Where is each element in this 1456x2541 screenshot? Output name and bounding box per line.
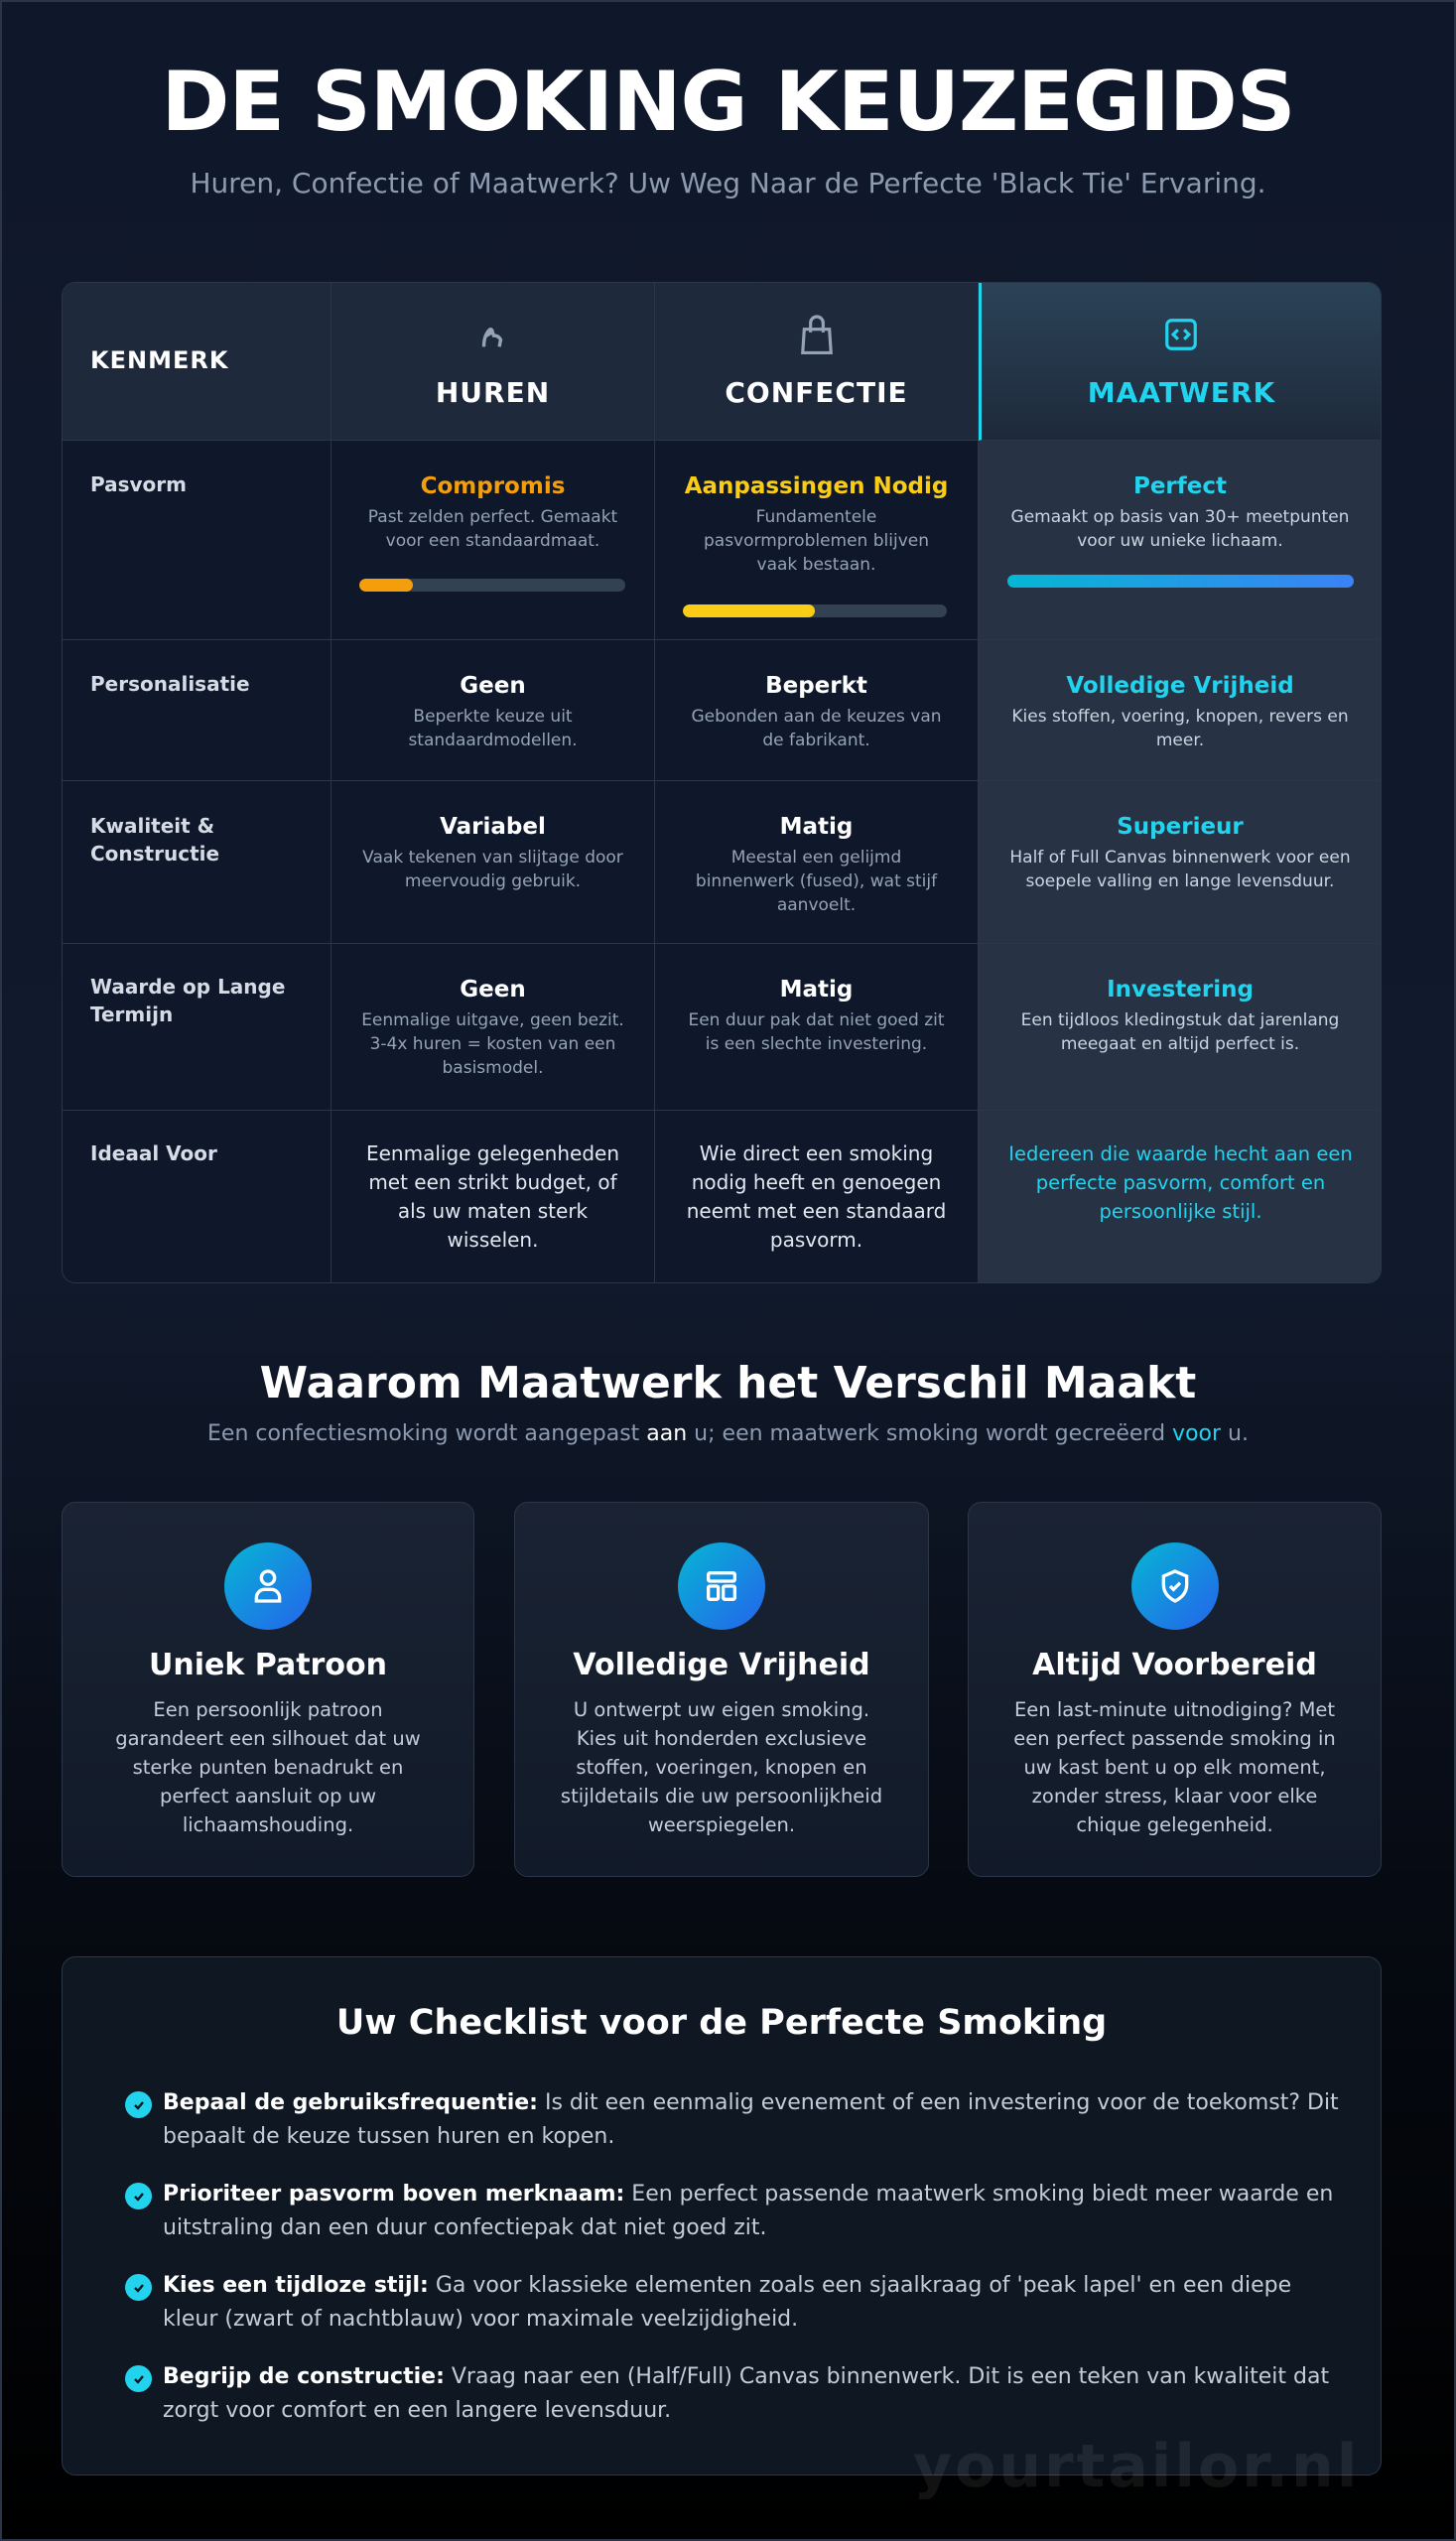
section heading: waarom maatwerk: Waarom Maatwerk het Verschil Maakt — [260, 1358, 1196, 1408]
row: ideaal voor: Ideaal Voor — [90, 1141, 217, 1165]
header: huren: HUREN — [436, 376, 550, 409]
icon: hand — [482, 328, 502, 347]
bar: confectie fit — [683, 604, 947, 617]
comparison table: Wie direct een smoking nodig heeft en genoegen neemt met een standaard pasvorm. — [687, 1141, 946, 1252]
card: altijd voorbereid — [968, 1502, 1382, 1877]
comparison table — [62, 282, 1382, 1283]
card: volledige vrijheid — [514, 1502, 929, 1877]
checklist panel — [62, 1956, 1382, 2475]
watermark: yourtailor.nl — [913, 2432, 1360, 2501]
comparison table: Een tijdloos kledingstuk dat jarenlang meegaat en altijd perfect is. — [1021, 1010, 1339, 1054]
row: pasvorm: Pasvorm — [90, 472, 187, 496]
row: kwaliteit: Constructie — [90, 842, 219, 866]
title: DE SMOKING KEUZEGIDS — [161, 54, 1295, 150]
comparison table: Perfect — [1133, 473, 1227, 499]
comparison table: Gebonden aan de keuzes van de fabrikant. — [691, 707, 942, 750]
item 4: Begrijp de constructie: Vraag naar een (Half/Full) Canvas binnenwerk. Dit is een teken van kwaliteit dat zorgt voor comfort en een langere levensduur. — [163, 2364, 1329, 2423]
card: altijd voorbereid: Altijd Voorbereid — [1032, 1648, 1317, 1682]
header: huren — [331, 283, 655, 441]
card: uniek patroon: Uniek Patroon — [149, 1648, 387, 1682]
comparison table: Geen — [460, 673, 526, 699]
row: kwaliteit — [63, 781, 331, 944]
item 1: Bepaal de gebruiksfrequentie: Is dit een eenmalig evenement of een investering voor de toekomst? Dit bepaalt de keuze tussen huren en kopen. — [163, 2090, 1339, 2149]
checklist title: Uw Checklist voor de Perfecte Smoking — [336, 2003, 1107, 2043]
item 3: Kies een tijdloze stijl: Ga voor klassieke elementen zoals een sjaalkraag of 'peak lapel' en een diepe kleur (zwart of nachtblauw) voor maximale veelzijdigheid. — [163, 2273, 1291, 2332]
comparison table: Superieur — [1117, 814, 1244, 840]
row: kwaliteit: Kwaliteit & — [90, 814, 214, 838]
header: kenmerk — [63, 283, 331, 441]
subtitle: Huren, Confectie of Maatwerk? Uw Weg Naar de Perfecte 'Black Tie' Ervaring. — [190, 167, 1266, 200]
comparison table: Aanpassingen Nodig — [685, 473, 948, 499]
row: waarde: Waarde op Lange — [90, 975, 285, 999]
comparison table: Past zelden perfect. Gemaakt voor een standaardmaat. — [368, 507, 617, 551]
row: personalisatie: Personalisatie — [90, 672, 250, 696]
item 2: Prioriteer pasvorm boven merknaam: Een perfect passende maatwerk smoking biedt meer waarde en uitstraling dan een duur confectiepak dat niet goed zit. — [163, 2182, 1333, 2240]
bar: huren fit — [359, 579, 625, 592]
icon: bag — [801, 315, 833, 354]
comparison table: Geen — [460, 977, 526, 1003]
comparison table: Eenmalige uitgave, geen bezit. 3-4x huren = kosten van een basismodel. — [361, 1010, 624, 1078]
bar: maatwerk fit — [1007, 575, 1354, 588]
card: uniek patroon — [62, 1502, 474, 1877]
comparison table: Eenmalige gelegenheden met een strikt budget, of als uw maten sterk wisselen. — [366, 1141, 619, 1252]
row: ideaal voor — [63, 1111, 331, 1284]
comparison table: Variabel — [440, 814, 546, 840]
comparison table: Matig — [780, 814, 853, 840]
header: maatwerk: MAATWERK — [1088, 376, 1275, 409]
card: volledige vrijheid: U ontwerpt uw eigen smoking. Kies uit honderden exclusieve stoffen, voeringen, knopen en stijldetails die uw persoonlijkheid weerspiegelen. — [561, 1698, 882, 1836]
header: kenmerk: KENMERK — [90, 346, 228, 374]
comparison table: Vaak tekenen van slijtage door meervoudig gebruik. — [362, 848, 623, 891]
comparison table: Meestal een gelijmd binnenwerk (fused), wat stijf aanvoelt. — [696, 848, 937, 915]
comparison table: Half of Full Canvas binnenwerk voor een soepele valling en lange levensduur. — [1009, 848, 1351, 891]
comparison table: Beperkte keuze uit standaardmodellen. — [408, 707, 578, 750]
row: waarde: Termijn — [90, 1003, 173, 1026]
card: volledige vrijheid: Volledige Vrijheid — [573, 1648, 870, 1682]
comparison table: Investering — [1107, 977, 1254, 1003]
comparison table: Iedereen die waarde hecht aan een perfecte pasvorm, comfort en persoonlijke stijl. — [1008, 1142, 1353, 1223]
icon: code box — [1165, 319, 1197, 350]
comparison table: Compromis — [421, 473, 565, 499]
section subtitle: Een confectiesmoking wordt aangepast aan u; een maatwerk smoking wordt gecreëerd voor u. — [207, 1421, 1249, 1446]
card: uniek patroon: Een persoonlijk patroon garandeert een silhouet dat uw sterke punten benadrukt en perfect aansluit op uw lichaamshouding. — [115, 1698, 421, 1836]
comparison table: Beperkt — [765, 673, 867, 699]
header: confectie — [655, 283, 979, 441]
row: waarde — [63, 944, 331, 1111]
card: altijd voorbereid: Een last-minute uitnodiging? Met een perfect passende smoking in uw kast bent u op elk moment, zonder stress, klaar voor elke chique gelegenheid. — [1013, 1698, 1336, 1836]
icon: layout — [678, 1542, 765, 1630]
icon: user — [224, 1542, 312, 1630]
comparison table: Matig — [780, 977, 853, 1003]
row: personalisatie — [63, 640, 331, 781]
header: maatwerk — [979, 283, 1383, 441]
header: confectie: CONFECTIE — [725, 376, 908, 409]
comparison table: Kies stoffen, voering, knopen, revers en meer. — [1011, 707, 1349, 750]
comparison table: Een duur pak dat niet goed zit is een slechte investering. — [688, 1010, 945, 1054]
comparison table: Volledige Vrijheid — [1066, 673, 1294, 699]
comparison table: Gemaakt op basis van 30+ meetpunten voor uw unieke lichaam. — [1011, 507, 1349, 551]
row: pasvorm — [63, 441, 331, 640]
icon: shield — [1131, 1542, 1219, 1630]
comparison table: Fundamentele pasvormproblemen blijven vaak bestaan. — [704, 507, 929, 575]
